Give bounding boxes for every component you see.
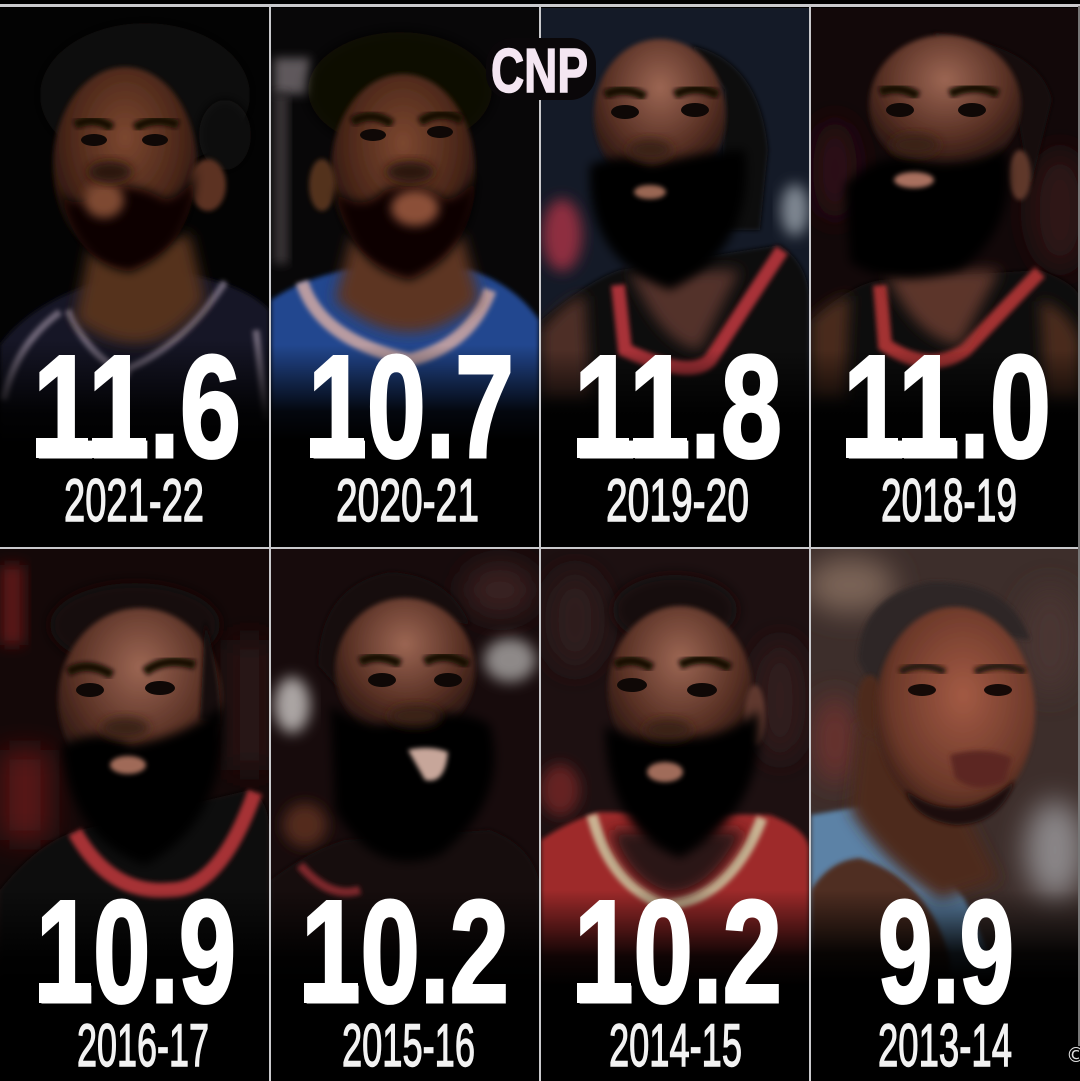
panel: 2018-19 bbox=[811, 8, 1078, 403]
panel: 2019-20 bbox=[541, 8, 809, 403]
slab feet on the digit 1 bbox=[36, 438, 956, 1003]
season: 2020-21: 2020-21 bbox=[336, 467, 479, 534]
panel: 2021-22 bbox=[0, 23, 269, 418]
value: 9.9: 9.9 bbox=[878, 870, 1014, 1033]
value: 11.8: 11.8 bbox=[574, 325, 782, 488]
portrait: 2021-22 bbox=[0, 23, 269, 418]
portrait: 2013-14 bbox=[811, 582, 1035, 1000]
value: 10.2 (2014-15): 10.2 bbox=[574, 870, 782, 1033]
season: 2014-15: 2014-15 bbox=[609, 1012, 742, 1079]
panel: 2014-15 bbox=[541, 549, 809, 970]
value: 10.2 (2015-16): 10.2 bbox=[301, 870, 509, 1033]
logo: CNP: CNP bbox=[491, 37, 588, 106]
panel: 2016-17 bbox=[0, 549, 269, 934]
panel: 2020-21 bbox=[271, 32, 539, 424]
season: 2021-22: 2021-22 bbox=[64, 467, 204, 534]
portrait: 2016-17 bbox=[1, 604, 269, 900]
panel: 2015-16 bbox=[271, 549, 539, 940]
portrait: 2019-20 bbox=[541, 36, 809, 399]
season: 2015-16: 2015-16 bbox=[342, 1012, 475, 1079]
portrait: 2015-16 bbox=[271, 572, 539, 1000]
season: 2016-17: 2016-17 bbox=[77, 1012, 209, 1079]
value: 10.7: 10.7 bbox=[308, 325, 514, 488]
portrait: 2020-21 bbox=[271, 64, 539, 423]
portrait: 2018-19 bbox=[811, 32, 1078, 399]
value: 10.9: 10.9 bbox=[36, 870, 236, 1033]
panel: 2013-14 bbox=[811, 549, 1078, 966]
season: 2019-20: 2019-20 bbox=[606, 467, 749, 534]
value: 11.6: 11.6 bbox=[33, 325, 241, 488]
portrait: 2014-15 bbox=[541, 575, 809, 1000]
